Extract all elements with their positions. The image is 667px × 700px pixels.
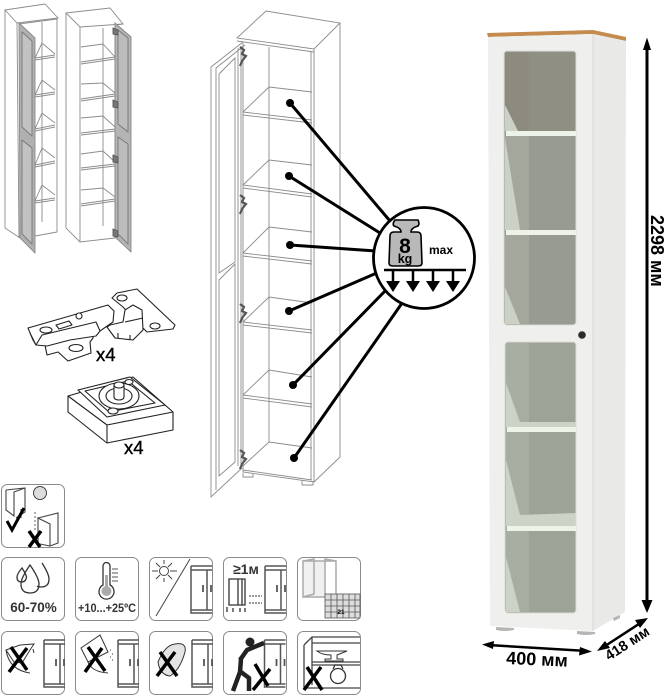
leader dots	[285, 99, 298, 462]
height arrow	[646, 42, 648, 610]
cabinet feet	[243, 473, 313, 485]
icon: avoid sunlight	[150, 558, 212, 620]
height dimension	[642, 38, 667, 613]
cabinet top	[237, 11, 340, 52]
icon: no wet cloth	[150, 632, 213, 694]
upper glass	[504, 51, 576, 325]
width dimension	[482, 641, 592, 671]
leader lines	[289, 103, 407, 458]
weight icon	[389, 220, 422, 266]
large open cabinet drawing	[211, 11, 340, 497]
max label: max	[429, 243, 453, 257]
feet	[496, 615, 620, 635]
depth label: 418 мм	[602, 624, 653, 664]
badge circle	[374, 208, 474, 308]
hinge quantity: x4	[96, 344, 116, 365]
small cabinet: door open view	[66, 8, 131, 252]
depth dimension	[597, 618, 653, 664]
small cabinet: door closing view	[5, 4, 58, 253]
hinge hardware	[28, 289, 175, 361]
load callout: leader lines and badge	[285, 99, 474, 462]
lower shelves	[507, 427, 576, 432]
worktop	[487, 30, 626, 41]
downward load arrows	[384, 270, 466, 292]
icon: humidity	[2, 558, 64, 620]
support quantity: x4	[124, 437, 144, 458]
icon: heater distance	[224, 558, 286, 620]
product photo: cabinet	[487, 30, 626, 635]
height label: 2298 мм	[647, 215, 667, 287]
depth arrow	[602, 622, 642, 648]
shelf support hardware	[68, 377, 173, 443]
calendar day: 21	[337, 609, 345, 616]
door hinges	[240, 47, 246, 469]
cabinet body	[243, 23, 340, 482]
open door	[211, 42, 245, 497]
side panel	[593, 34, 626, 631]
icon: no powder	[76, 632, 139, 694]
front panel	[488, 34, 593, 631]
width label: 400 мм	[506, 648, 568, 671]
icon: do not lean on cabinet	[224, 632, 286, 694]
icon: no liquids	[2, 632, 65, 694]
icon: no heavy objects	[298, 632, 360, 694]
width arrow	[488, 645, 587, 651]
distance label: ≥1м	[233, 561, 259, 577]
handle	[578, 331, 586, 339]
weight value: 8	[399, 235, 411, 258]
lower glass	[505, 342, 576, 613]
humidity range: 60-70%	[10, 600, 57, 615]
icon: door adjust check	[2, 484, 64, 548]
temperature range: +10...+25ºC	[78, 601, 136, 615]
shelves	[243, 87, 312, 480]
weight unit: kg	[398, 252, 412, 266]
upper shelves	[506, 131, 576, 136]
care icons	[2, 484, 360, 694]
icon: temperature	[76, 558, 138, 620]
icon: ventilate daily	[298, 558, 360, 620]
